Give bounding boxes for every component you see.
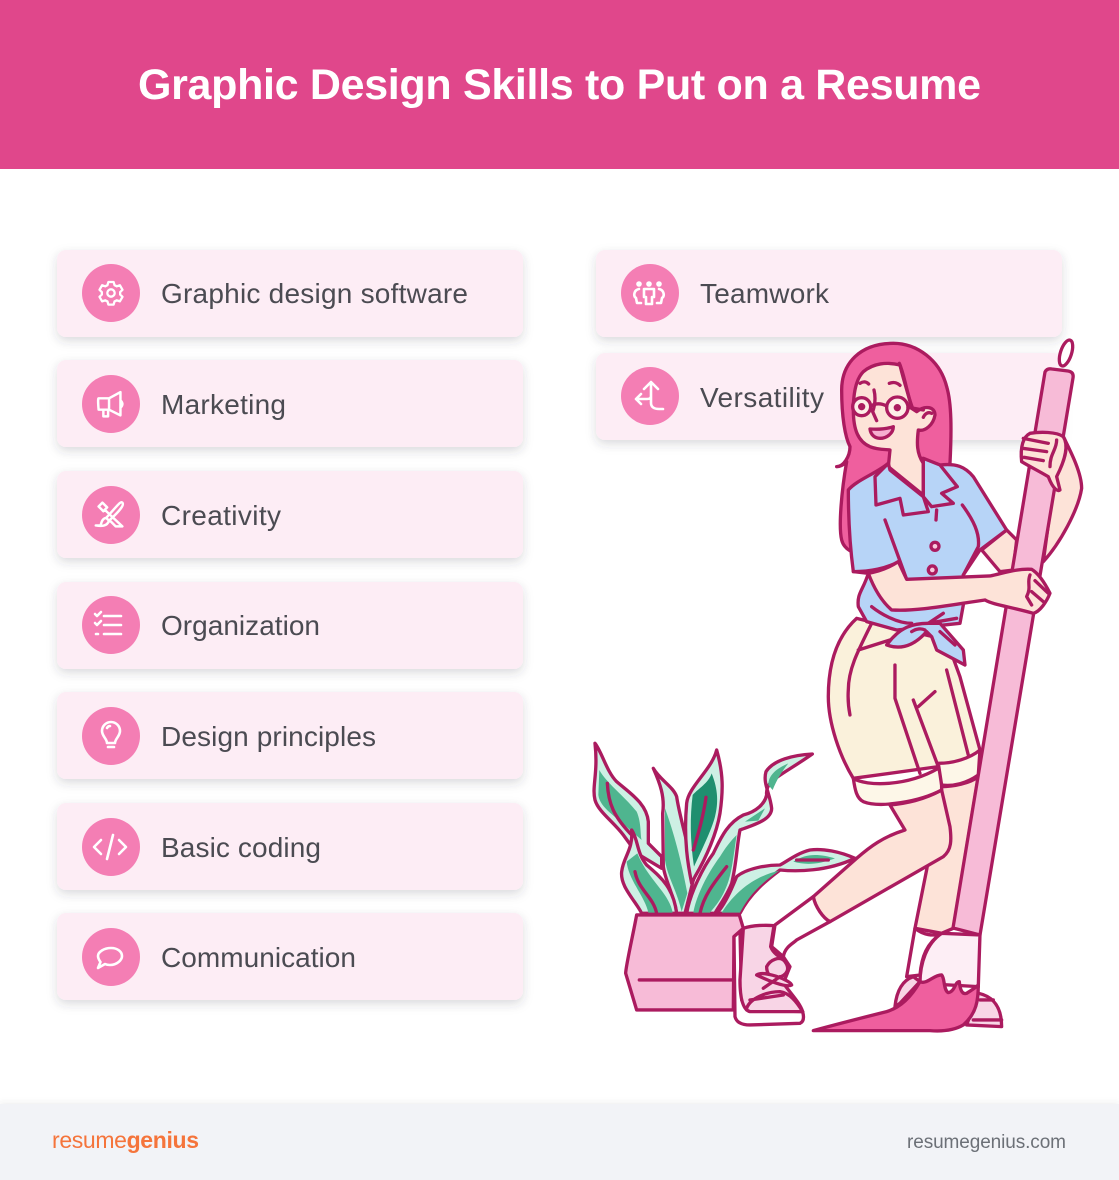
icon: code brackets bbox=[94, 835, 126, 859]
blue shirt bbox=[848, 458, 1007, 630]
right upper arm behind brush bbox=[982, 437, 1082, 572]
illustration: woman with giant paintbrush and plant bbox=[594, 338, 1082, 1031]
icon: branching arrows bbox=[636, 382, 663, 409]
skill card: Marketing bbox=[57, 360, 523, 447]
mouth bbox=[870, 427, 893, 438]
shirt tie knot bbox=[887, 623, 965, 665]
header banner bbox=[0, 0, 1119, 169]
arms and hands gripping brush bbox=[868, 432, 1066, 613]
website url: resumegenius.com bbox=[907, 1132, 1066, 1153]
skill card: Design principles: Design principles bbox=[161, 721, 376, 752]
skill card: Creativity: Creativity bbox=[161, 500, 281, 531]
icon: speech bubble bbox=[98, 948, 122, 968]
skill card: Communication bbox=[57, 913, 523, 1000]
plant bbox=[594, 743, 855, 1010]
skill card: Basic coding: Basic coding bbox=[161, 832, 321, 863]
hair, back layer bbox=[837, 343, 951, 552]
icon: gear bbox=[99, 282, 123, 305]
icon: light bulb bbox=[102, 722, 120, 747]
icon: team of three bbox=[634, 281, 664, 304]
icon: megaphone bbox=[98, 392, 122, 416]
giant paintbrush handle bbox=[953, 338, 1075, 935]
collar bbox=[875, 463, 928, 515]
skill card: Marketing: Marketing bbox=[161, 389, 286, 420]
skill card: Teamwork: Teamwork bbox=[700, 278, 830, 309]
footer bar bbox=[0, 1104, 1119, 1180]
title: Graphic Design Skills to Put on a Resume bbox=[138, 61, 981, 109]
icon: brush and pencil bbox=[96, 502, 123, 526]
plant pot bbox=[626, 915, 743, 1010]
skill card: Creativity bbox=[57, 471, 523, 558]
shorts bbox=[828, 618, 980, 778]
skill card: Teamwork bbox=[596, 250, 1062, 337]
skill card: Basic coding bbox=[57, 803, 523, 890]
skill card: Graphic design software: Graphic design software bbox=[161, 278, 468, 309]
logo: resumegenius: resumegenius bbox=[52, 1127, 199, 1153]
glasses bbox=[853, 398, 871, 416]
skill card: Graphic design software bbox=[57, 250, 523, 337]
skill card: Design principles bbox=[57, 692, 523, 779]
skill card: Organization: Organization bbox=[161, 610, 320, 641]
skill card: Organization bbox=[57, 582, 523, 669]
legs and shoes bbox=[734, 618, 1002, 1027]
skill card: Versatility bbox=[596, 353, 1062, 440]
skill card: Communication: Communication bbox=[161, 942, 356, 973]
face and neck bbox=[853, 363, 935, 495]
skill card: Versatility: Versatility bbox=[700, 382, 824, 413]
torso and head bbox=[848, 363, 1007, 665]
brush head with paint bbox=[813, 933, 980, 1031]
icon: checklist bbox=[95, 612, 121, 634]
